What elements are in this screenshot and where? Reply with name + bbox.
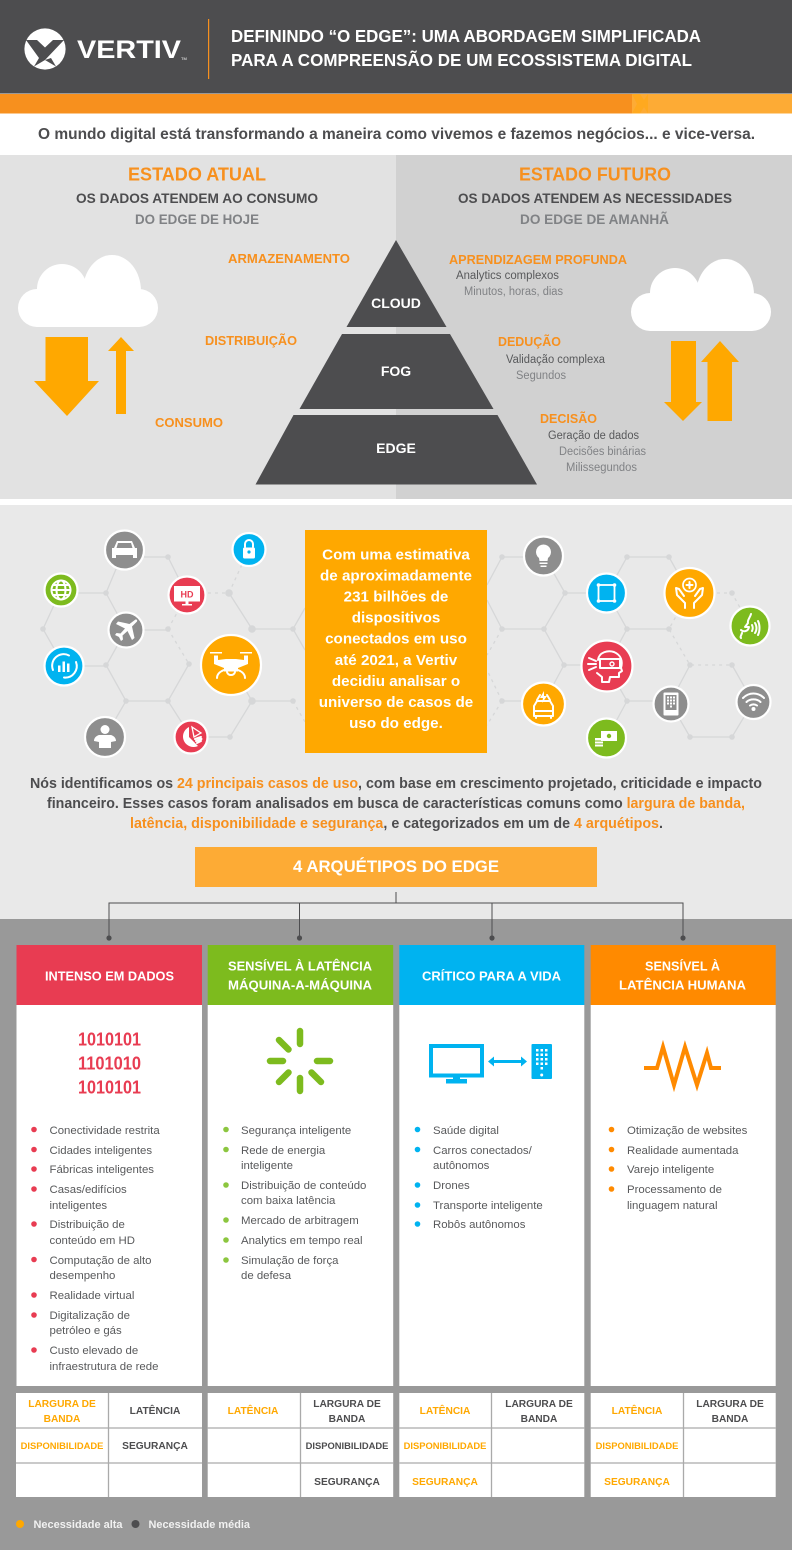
heading: estado atual: DO EDGE DE HOJE xyxy=(135,211,259,227)
arrow: right down xyxy=(664,341,702,421)
list: inteligentes xyxy=(50,1200,107,1212)
tier: cloud: CLOUD xyxy=(371,295,421,311)
arrow: right up xyxy=(701,341,739,421)
table: intenso em dados: LATÊNCIA xyxy=(130,1404,181,1417)
title: PARA A COMPREENSÃO DE UM ECOSSISTEMA DIGITAL xyxy=(231,49,692,70)
icon: person xyxy=(85,717,125,757)
table: intenso em dados: SEGURANÇA xyxy=(122,1441,188,1452)
list: Rede de energia xyxy=(241,1145,326,1157)
heading: estado futuro: DO EDGE DE AMANHÃ xyxy=(520,210,669,227)
icon: pie xyxy=(174,720,208,754)
table: latência humana: SEGURANÇA xyxy=(604,1477,670,1488)
labels: left: CONSUMO xyxy=(155,415,223,430)
list: linguagem natural xyxy=(627,1200,718,1212)
icon: monitor and phone xyxy=(431,1044,552,1084)
icon: drone xyxy=(201,635,261,695)
icon: HD screen xyxy=(168,576,206,614)
heading: estado futuro: ESTADO FUTURO xyxy=(519,164,671,184)
callout: até 2021, a Vertiv xyxy=(335,652,458,669)
heading: 4 arquétipos xyxy=(195,847,597,887)
table: latência humana: DISPONIBILIDADE xyxy=(596,1440,678,1451)
table: máquina-a-máquina: BANDA xyxy=(329,1414,366,1425)
callout: dispositivos xyxy=(352,610,440,626)
icon: loader xyxy=(270,1031,330,1091)
card header: SENSÍVEL À xyxy=(645,958,721,974)
labels: right: DEDUÇÃO xyxy=(498,334,561,349)
panel: crítico para a vida xyxy=(399,945,584,1386)
icon: pulse xyxy=(644,1047,721,1085)
table: crítico para a vida: DISPONIBILIDADE xyxy=(404,1440,486,1451)
labels: right: Validação complexa xyxy=(506,354,606,366)
panel: estado atual / futuro xyxy=(0,155,792,499)
list: conteúdo em HD xyxy=(50,1235,135,1247)
icon: VR headset xyxy=(582,640,632,692)
card header: INTENSO EM DADOS xyxy=(45,968,174,984)
table: crítico para a vida: BANDA xyxy=(521,1414,558,1425)
callout: uso do edge. xyxy=(349,715,443,732)
list: inteligente xyxy=(241,1160,293,1172)
subtitle: O mundo digital está transformando a maneira como vivemos e fazemos negócios... e vice-versa. xyxy=(38,126,755,143)
table: crítico para a vida: SEGURANÇA xyxy=(412,1477,478,1488)
tier: edge xyxy=(256,415,537,484)
list: infraestrutura de rede xyxy=(50,1361,158,1373)
network: left xyxy=(40,549,305,740)
labels: right: Decisões binárias xyxy=(559,446,646,458)
heading: estado atual: OS DADOS ATENDEM AO CONSUMO xyxy=(76,190,318,206)
list: Fábricas inteligentes xyxy=(50,1164,154,1176)
text block: intro paragraph: latência, disponibilidade e segurança, e categorizados em um de 4 arquétipos. xyxy=(130,816,663,832)
list: Digitalização de xyxy=(50,1310,130,1322)
list: Varejo inteligente xyxy=(627,1164,714,1176)
icon: binary xyxy=(78,1030,141,1098)
list: Processamento de xyxy=(627,1184,722,1196)
labels: right: DECISÃO xyxy=(540,411,597,426)
table: latência humana: BANDA xyxy=(712,1414,749,1425)
list: Analytics em tempo real xyxy=(241,1235,363,1247)
list: Conectividade restrita xyxy=(50,1125,160,1137)
icon: money xyxy=(587,718,626,758)
icon: binary: 1010101 xyxy=(78,1030,141,1050)
table: latência humana xyxy=(591,1393,776,1497)
header band xyxy=(0,0,792,93)
list: Saúde digital xyxy=(433,1125,499,1137)
labels: left: DISTRIBUIÇÃO xyxy=(205,333,297,348)
card header xyxy=(208,945,393,1005)
card header xyxy=(16,945,202,1005)
icon: HD screen: HD xyxy=(180,590,194,600)
list: Otimização de websites xyxy=(627,1125,748,1137)
table: latência humana: LARGURA DE xyxy=(696,1399,764,1410)
list: de defesa xyxy=(241,1270,292,1282)
table: crítico para a vida: LARGURA DE xyxy=(505,1399,573,1410)
list: Mercado de arbitragem xyxy=(241,1215,359,1227)
arrow: left small up xyxy=(108,337,134,414)
list: Realidade virtual xyxy=(50,1290,134,1302)
callout: 231 bilhões de xyxy=(344,588,448,606)
icon: car xyxy=(105,530,144,570)
labels: right: Milissegundos xyxy=(566,462,637,474)
table: crítico para a vida: LATÊNCIA xyxy=(420,1404,471,1417)
list: petróleo e gás xyxy=(50,1325,122,1337)
icon: lock xyxy=(232,533,266,566)
icon: left cloud xyxy=(18,255,158,327)
heading: 4 arquétipos: 4 ARQUÉTIPOS DO EDGE xyxy=(293,857,499,876)
list: com baixa latência xyxy=(241,1195,336,1207)
list xyxy=(31,1125,160,1373)
text block: intro paragraph: Nós identificamos os 24 principais casos de uso, com base em crescimento projetado, criticidade e impacto xyxy=(30,776,762,792)
connectors xyxy=(106,892,686,941)
icon: hands xyxy=(664,568,714,618)
tier: edge: EDGE xyxy=(376,440,416,456)
title: DEFININDO “O EDGE”: UMA ABORDAGEM SIMPLIFICADA xyxy=(231,26,701,46)
icon: chart xyxy=(44,646,84,686)
icon: bulb xyxy=(524,536,563,576)
labels: right: Minutos, horas, dias xyxy=(464,286,563,298)
list: Robôs autônomos xyxy=(433,1219,526,1231)
list: Casas/edifícios xyxy=(50,1184,127,1196)
callout: decidiu analisar o xyxy=(332,673,460,690)
list: Simulação de força xyxy=(241,1255,339,1267)
list: Computação de alto xyxy=(50,1255,151,1267)
callout: universo de casos de xyxy=(319,694,473,711)
icon: electric car xyxy=(522,682,565,726)
labels: left xyxy=(155,251,350,430)
list: Transporte inteligente xyxy=(433,1200,543,1212)
list: autônomos xyxy=(433,1160,490,1172)
list: Realidade aumentada xyxy=(627,1145,739,1157)
icon: plane xyxy=(108,612,144,648)
logo: Vertiv: VERTIV xyxy=(77,36,181,64)
panel: sensível máquina-a-máquina xyxy=(208,945,393,1386)
tier: cloud xyxy=(346,240,446,327)
icon: frame xyxy=(587,574,626,612)
logo: Vertiv xyxy=(24,28,187,70)
heading: estado futuro: OS DADOS ATENDEM AS NECESSIDADES xyxy=(458,190,732,206)
pyramid xyxy=(256,240,537,484)
panel: use cases xyxy=(0,505,792,919)
table: intenso em dados: DISPONIBILIDADE xyxy=(21,1440,103,1451)
network: right xyxy=(487,554,753,740)
labels: right xyxy=(449,252,646,474)
icon: wifi xyxy=(736,685,770,719)
tier: fog xyxy=(300,334,494,409)
callout xyxy=(305,530,487,753)
labels: right: Analytics complexos xyxy=(456,270,559,282)
tier: fog: FOG xyxy=(381,363,411,379)
text block: intro paragraph xyxy=(30,776,762,832)
panel: intenso em dados xyxy=(16,945,202,1386)
list xyxy=(223,1125,366,1282)
table: intenso em dados: BANDA xyxy=(44,1414,81,1425)
callout: Com uma estimativa xyxy=(322,546,470,564)
table: máquina-a-máquina: SEGURANÇA xyxy=(314,1477,380,1488)
list: Distribuição de conteúdo xyxy=(241,1180,366,1192)
card header: LATÊNCIA HUMANA xyxy=(619,978,747,992)
table: intenso em dados xyxy=(16,1393,202,1497)
text block: intro paragraph: financeiro. Esses casos foram analisados em busca de características comuns como largura de banda, xyxy=(47,796,745,812)
table: máquina-a-máquina: DISPONIBILIDADE xyxy=(306,1440,388,1451)
list: desempenho xyxy=(50,1270,115,1282)
legend: Necessidade média xyxy=(148,1519,251,1531)
labels: right: Segundos xyxy=(516,370,566,382)
legend: Necessidade alta xyxy=(34,1519,123,1531)
table: latência humana: LATÊNCIA xyxy=(612,1404,663,1417)
list: Drones xyxy=(433,1180,470,1192)
icon: phone keypad xyxy=(654,686,688,722)
callout: conectados em uso xyxy=(325,630,467,648)
legend xyxy=(16,1519,251,1531)
logo: Vertiv: TM xyxy=(181,56,187,61)
arrow: left large down xyxy=(34,337,99,416)
card header: MÁQUINA-A-MÁQUINA xyxy=(228,978,373,992)
card header xyxy=(591,945,776,1005)
card header: CRÍTICO PARA A VIDA xyxy=(422,968,562,984)
card header xyxy=(399,945,584,1005)
labels: right: Geração de dados xyxy=(548,430,639,442)
callout: de aproximadamente xyxy=(320,568,472,584)
heading: estado atual xyxy=(76,164,318,227)
card header: SENSÍVEL À LATÊNCIA xyxy=(228,958,373,974)
list xyxy=(415,1125,543,1231)
table: máquina-a-máquina: LARGURA DE xyxy=(313,1399,381,1410)
icon: binary: 1101010 xyxy=(78,1054,141,1074)
orange bar xyxy=(0,94,792,114)
list: Carros conectados/ xyxy=(433,1145,533,1157)
heading: estado atual: ESTADO ATUAL xyxy=(128,164,266,184)
heading: estado futuro xyxy=(458,164,732,227)
title xyxy=(231,26,701,70)
list: Custo elevado de xyxy=(50,1345,138,1357)
list: Distribuição de xyxy=(50,1219,125,1231)
icon: right cloud xyxy=(631,259,771,331)
icon: globe xyxy=(44,574,78,606)
panel: sensível latência humana xyxy=(591,945,776,1386)
labels: left: ARMAZENAMENTO xyxy=(228,251,350,266)
table: intenso em dados: LARGURA DE xyxy=(28,1399,96,1410)
list: Segurança inteligente xyxy=(241,1125,351,1137)
list: Cidades inteligentes xyxy=(50,1145,152,1157)
icon: binary: 1010101 xyxy=(78,1078,141,1098)
icon: voice xyxy=(730,606,770,646)
labels: right: APRENDIZAGEM PROFUNDA xyxy=(449,252,628,267)
table: crítico para a vida xyxy=(399,1393,584,1497)
list xyxy=(609,1125,748,1212)
table: máquina-a-máquina: LATÊNCIA xyxy=(228,1404,279,1417)
table: máquina-a-máquina xyxy=(208,1393,393,1497)
